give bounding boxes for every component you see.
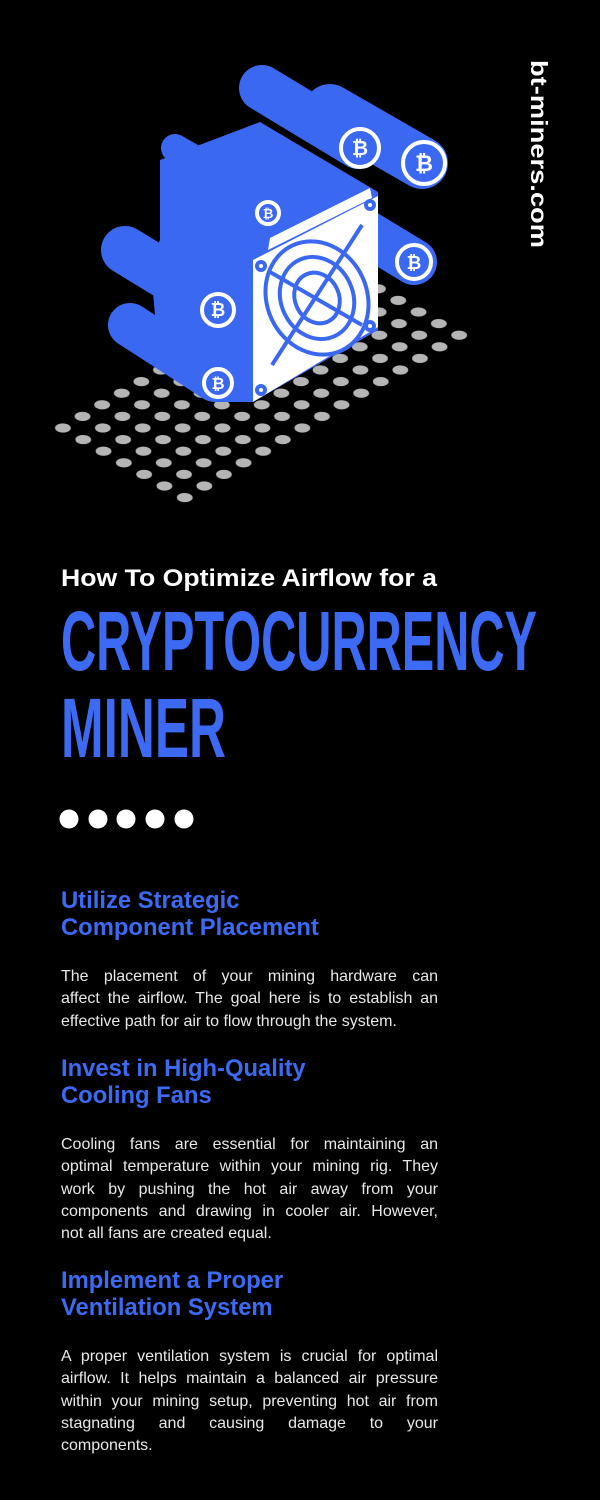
- illustration: crypto mining hardware: ₿: [352, 138, 368, 160]
- title block: [61, 565, 537, 770]
- heading: section 1: Component Placement: [61, 914, 319, 941]
- text: section 3: airflow. It helps maintain a balanced air pressure: [61, 1370, 438, 1387]
- illustration: crypto mining hardware: ₿: [415, 151, 433, 176]
- illustration: crypto mining hardware: [54, 65, 468, 502]
- heading: section 2: [61, 1055, 306, 1109]
- heading: section 1: [61, 887, 319, 941]
- text: section 3: stagnating and causing damage to your: [61, 1415, 438, 1432]
- text: section 2: not all fans are created equal.: [61, 1225, 272, 1242]
- text: section 2: work by pushing the hot air away from your: [61, 1181, 438, 1198]
- vertical website label: bt-miners.com: [526, 60, 552, 248]
- heading: section 3: [61, 1267, 283, 1321]
- illustration: crypto mining hardware: ₿: [211, 375, 225, 393]
- cylinders and body: [125, 88, 422, 380]
- text: section 1: effective path for air to flow through the system.: [61, 1013, 397, 1030]
- illustration: crypto mining hardware: ₿: [407, 253, 421, 273]
- text: section 3: components.: [61, 1437, 153, 1454]
- decorative dots row: [60, 810, 194, 828]
- heading: section 3: Implement a Proper: [61, 1267, 283, 1294]
- text: section 2: Cooling fans are essential for maintaining an: [61, 1136, 438, 1153]
- text: section 2: components and drawing in cooler air. However,: [61, 1203, 438, 1220]
- text: section 2: [61, 1136, 438, 1242]
- text: section 1: affect the airflow. The goal here is to establish an: [61, 990, 438, 1007]
- heading: section 3: Ventilation System: [61, 1294, 273, 1321]
- text: section 3: within your mining setup, preventing hot air from: [61, 1393, 438, 1410]
- dot grid floor: [43, 254, 479, 509]
- text: section 3: [61, 1348, 438, 1454]
- text: section 3: A proper ventilation system is crucial for optimal: [61, 1348, 438, 1365]
- heading: section 2: Invest in High-Quality: [61, 1055, 306, 1082]
- heading: section 1: Utilize Strategic: [61, 887, 240, 914]
- illustration: crypto mining hardware: ₿: [211, 300, 225, 320]
- illustration: crypto mining hardware: ₿: [263, 206, 273, 221]
- fan face: [247, 188, 387, 402]
- text: section 1: [61, 968, 438, 1030]
- heading: section 2: Cooling Fans: [61, 1082, 212, 1109]
- text: section 2: optimal temperature within your mining rig. They: [61, 1158, 438, 1175]
- text: section 1: The placement of your mining hardware can: [61, 968, 438, 985]
- subtitle: How To Optimize Airflow for a: [61, 565, 438, 592]
- bitcoin coins: [202, 129, 445, 397]
